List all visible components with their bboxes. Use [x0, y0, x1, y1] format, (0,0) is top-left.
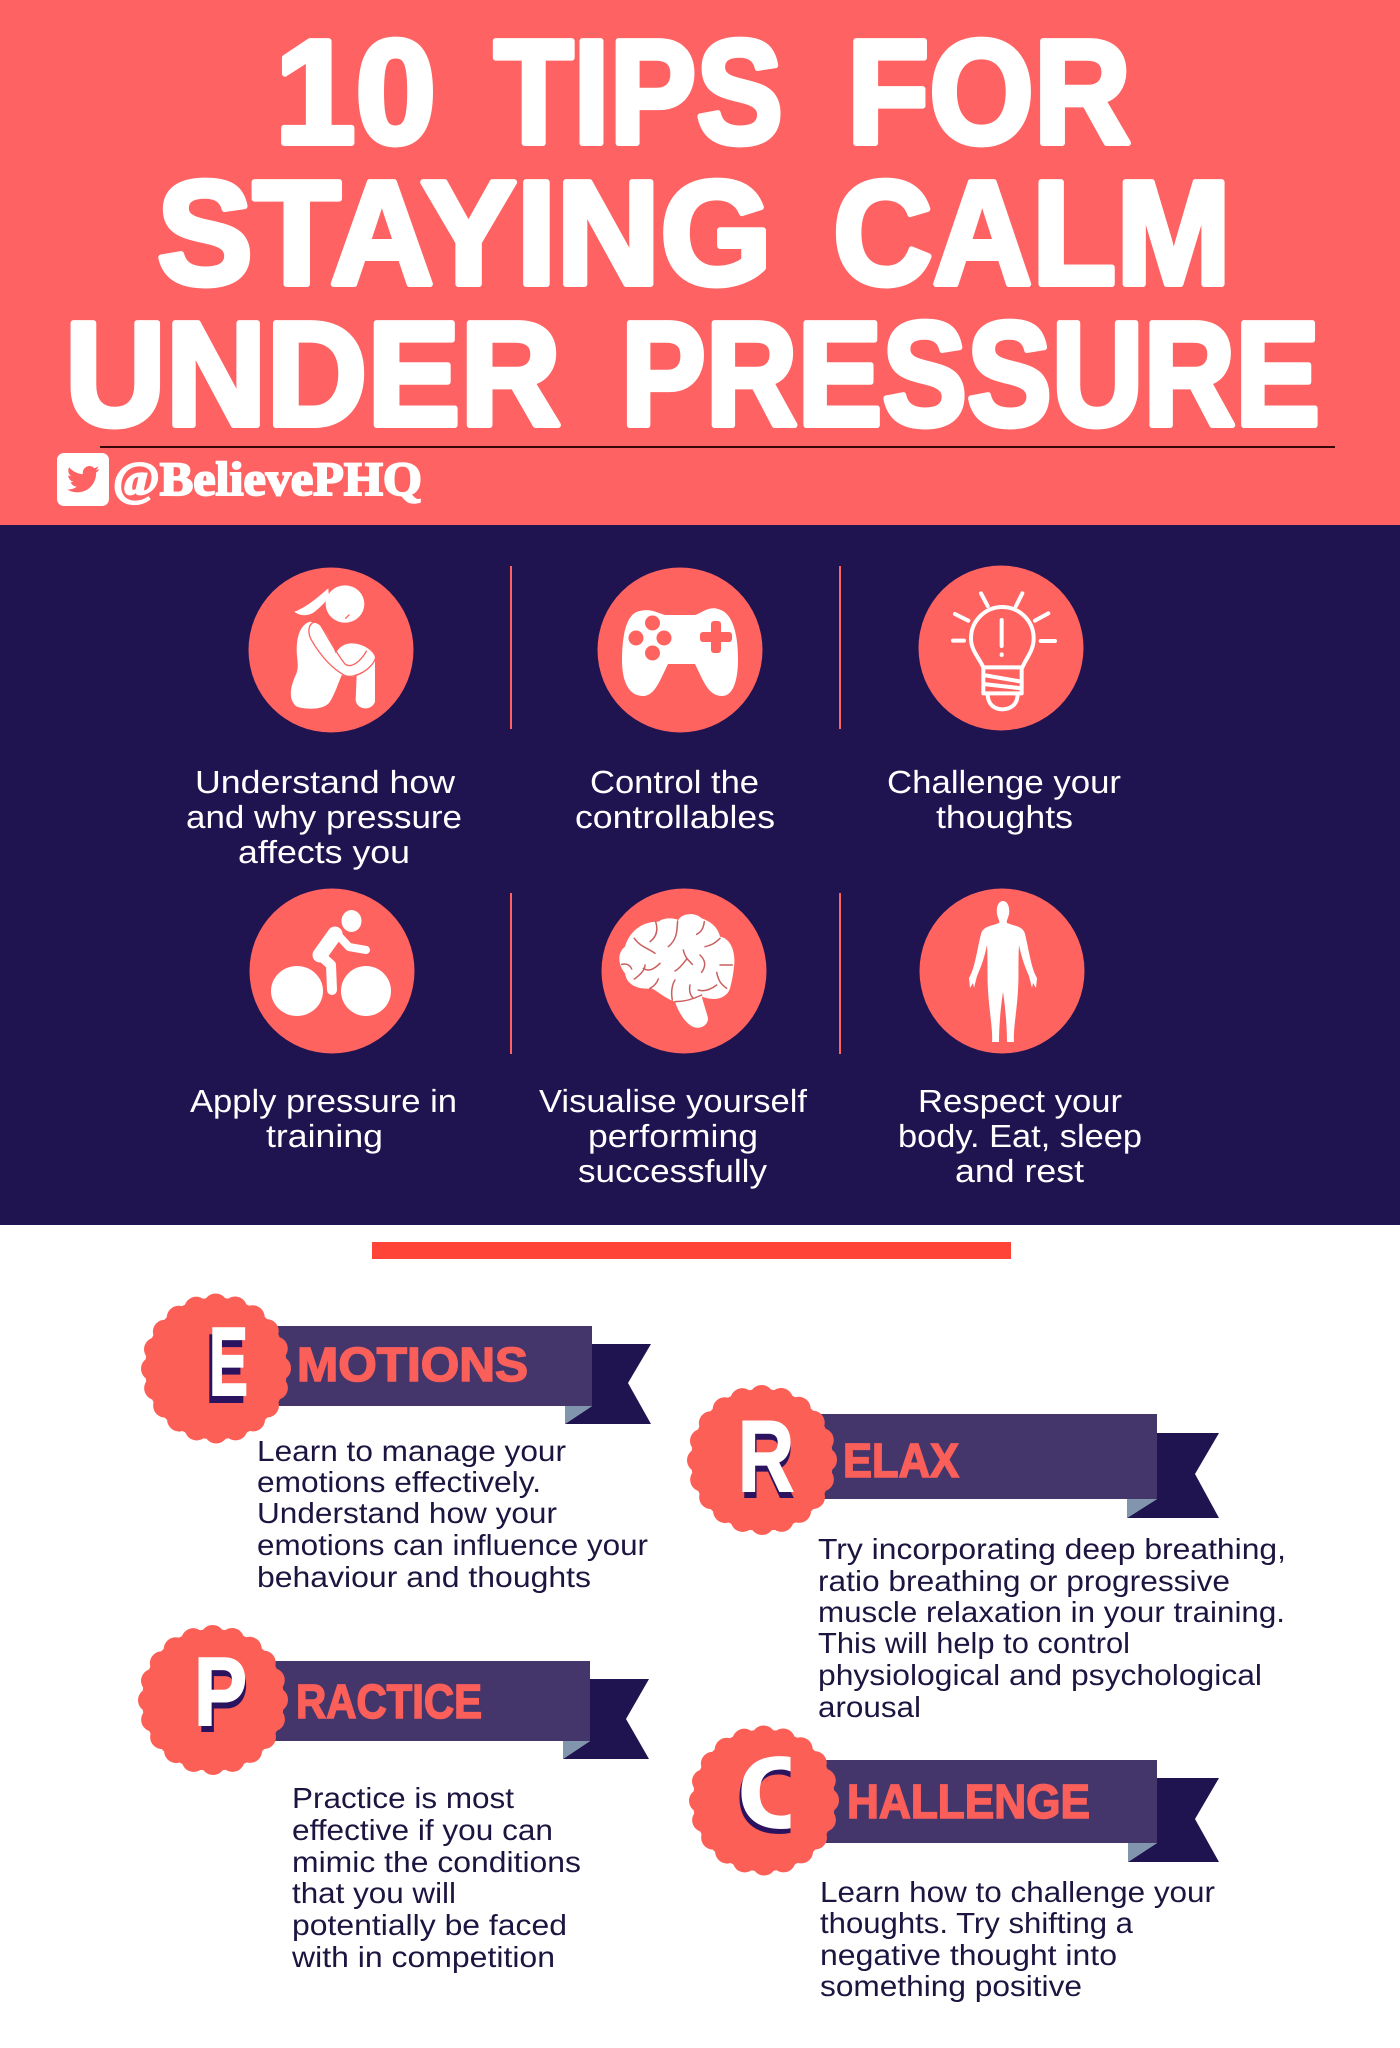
body text: that you will [292, 1878, 456, 1910]
label: Visualise yourself [539, 1083, 807, 1119]
tip: respect body [898, 888, 1142, 1189]
body text: physiological and psychological [818, 1660, 1262, 1692]
body text: muscle relaxation in your training. [818, 1597, 1285, 1629]
ribbon [250, 1661, 649, 1759]
tip: visualise [539, 888, 807, 1189]
label: Understand how [195, 764, 456, 800]
label: Control the [590, 764, 759, 800]
body text: Learn to manage your [257, 1436, 566, 1468]
label [186, 764, 462, 870]
body text: something positive [820, 1971, 1082, 2003]
heading: RACTICE [296, 1676, 482, 1729]
panel: practice [142, 1629, 649, 1974]
title: CALM [833, 151, 1231, 316]
label: controllables [575, 799, 775, 835]
label: body. Eat, sleep [898, 1118, 1142, 1154]
body text: behaviour and thoughts [257, 1562, 591, 1594]
badge [142, 1629, 284, 1771]
label: and rest [955, 1153, 1084, 1189]
label [575, 764, 775, 835]
body text: Understand how your [257, 1498, 557, 1530]
panel: challenge [693, 1730, 1219, 2003]
title: 10 [275, 10, 436, 175]
badge: E [206, 1314, 245, 1423]
title: FOR [847, 10, 1131, 175]
badge [691, 1389, 833, 1531]
tip: understand pressure [186, 568, 462, 870]
label: thoughts [936, 799, 1073, 835]
icon: brain [619, 914, 734, 1028]
body text: thoughts. Try shifting a [820, 1908, 1134, 1940]
label: successfully [578, 1153, 767, 1189]
title [65, 10, 1320, 457]
icon: light bulb [953, 593, 1055, 709]
heading: HALLENGE [847, 1776, 1090, 1829]
title: UNDER [65, 292, 561, 457]
icon: game controller [622, 608, 738, 696]
body text: emotions can influence your [257, 1530, 648, 1562]
tip: controllables [575, 568, 775, 835]
body text: emotions effectively. [257, 1467, 541, 1499]
tip: apply pressure [190, 888, 457, 1154]
body text: effective if you can [292, 1815, 553, 1847]
label [898, 1083, 1142, 1189]
body text: ratio breathing or progressive [818, 1566, 1230, 1598]
badge: R [738, 1401, 794, 1513]
panel: six tips [0, 525, 1400, 1225]
body text: negative thought into [820, 1940, 1117, 1972]
badge [145, 1298, 287, 1440]
panel: header [0, 0, 1400, 525]
red divider bar [372, 1242, 1011, 1259]
body text: This will help to control [818, 1628, 1130, 1660]
label: performing [588, 1118, 758, 1154]
ribbon [795, 1414, 1219, 1518]
label: affects you [238, 834, 410, 870]
icon: cyclist [271, 910, 391, 1016]
label [190, 1083, 457, 1154]
panel: relax [691, 1389, 1286, 1724]
label: Challenge your [887, 764, 1121, 800]
body text [818, 1534, 1286, 1724]
body text [291, 1783, 581, 1974]
title: TIPS [494, 10, 783, 175]
label [539, 1083, 807, 1189]
ribbon [795, 1760, 1219, 1862]
label: Apply pressure in [190, 1083, 457, 1119]
body text: with in competition [291, 1942, 555, 1974]
icon: twitter [57, 453, 109, 506]
label: and why pressure [186, 799, 462, 835]
icon: crouching woman [291, 585, 376, 709]
body text: potentially be faced [292, 1910, 567, 1942]
badge: E [209, 1307, 248, 1416]
tip: challenge thoughts [887, 566, 1121, 835]
badge: C [736, 1742, 816, 1854]
body text [820, 1877, 1215, 2003]
icon: human body [969, 901, 1037, 1042]
badge: P [194, 1637, 247, 1746]
body text: Practice is most [292, 1783, 514, 1815]
badge [693, 1730, 835, 1872]
label: training [266, 1118, 383, 1154]
heading: MOTIONS [297, 1339, 528, 1392]
badge: C [738, 1737, 818, 1849]
title: STAYING [157, 151, 772, 316]
body text: arousal [818, 1692, 921, 1724]
heading: ELAX [843, 1435, 959, 1488]
body text: Learn how to challenge your [820, 1877, 1215, 1909]
badge: P [197, 1643, 248, 1752]
twitter handle: @BelievePHQ [113, 453, 422, 506]
label: Respect your [918, 1083, 1122, 1119]
ribbon [250, 1326, 651, 1424]
badge: R [740, 1407, 794, 1519]
body text: mimic the conditions [292, 1847, 581, 1879]
body text: Try incorporating deep breathing, [818, 1534, 1286, 1566]
label [887, 764, 1121, 835]
panel: emotions [145, 1298, 651, 1594]
body text [257, 1436, 648, 1594]
